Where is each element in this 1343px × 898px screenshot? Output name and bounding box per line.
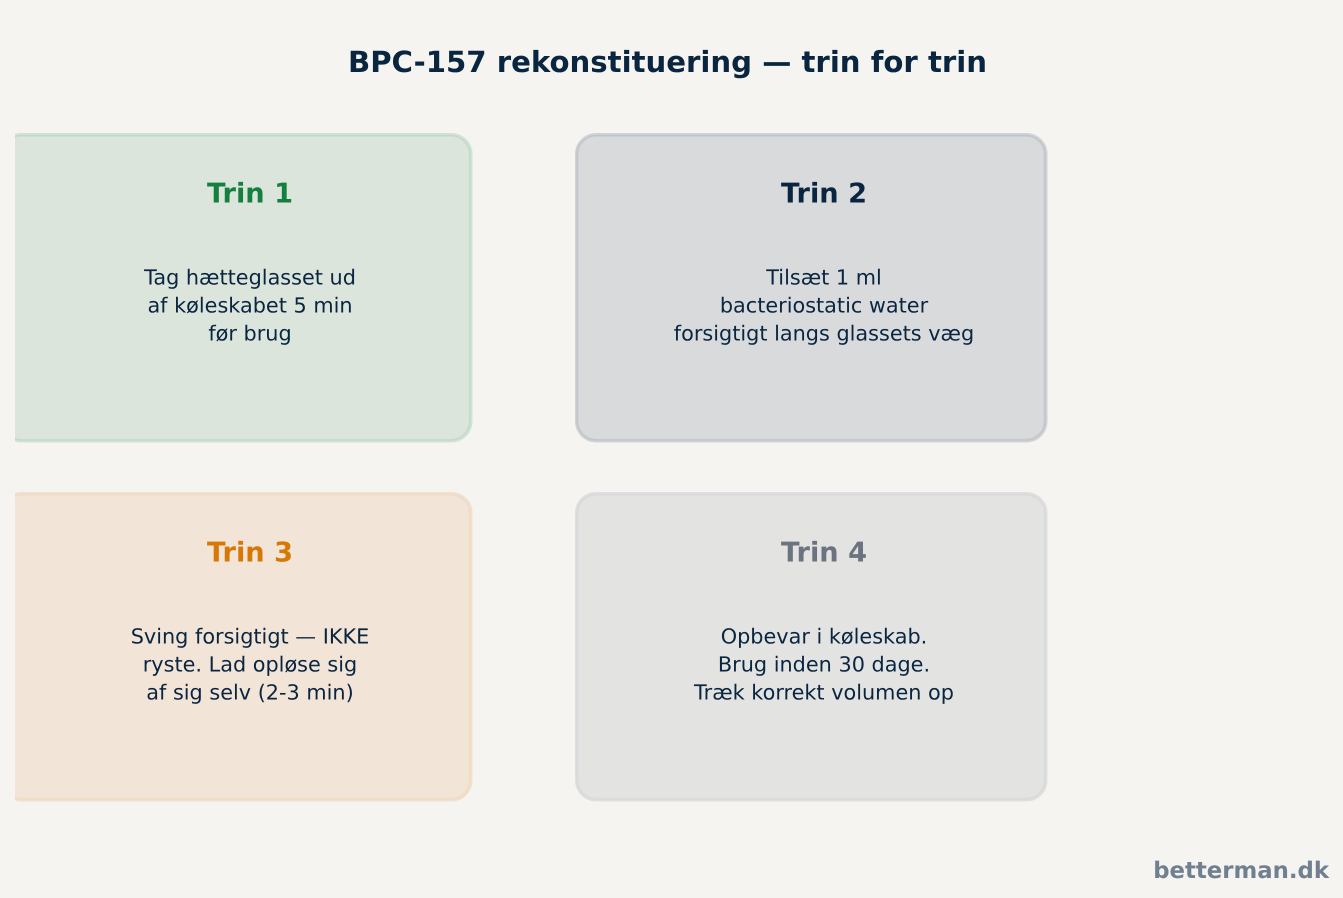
text block: Trin 2 instructions: Tilsæt 1 ml <box>765 266 882 290</box>
text block: Trin 4 instructions: Opbevar i køleskab. <box>721 624 927 648</box>
text block: Trin 1 instructions: før brug <box>208 322 292 346</box>
text block: Trin 4 instructions: Brug inden 30 dage. <box>718 652 930 676</box>
text block: Trin 3 instructions: af sig selv (2-3 min) <box>146 680 354 704</box>
title: BPC-157 rekonstituering — trin for trin <box>348 45 987 79</box>
heading: Trin 3: Trin 3 <box>207 538 293 568</box>
panel: Trin 4 <box>577 494 1046 800</box>
text block: Trin 2 instructions: forsigtigt langs glassets væg <box>674 322 974 346</box>
panel: Trin 2 <box>577 135 1046 440</box>
text block: Trin 1 instructions: Tag hætteglasset ud <box>143 266 356 290</box>
watermark: betterman.dk <box>1153 858 1330 884</box>
text block: Trin 3 instructions: ryste. Lad opløse sig <box>143 652 357 676</box>
heading: Trin 2: Trin 2 <box>781 178 867 210</box>
text block: Trin 2 instructions: bacteriostatic water <box>720 294 929 318</box>
text block: Trin 4 instructions: Træk korrekt volumen op <box>693 680 954 704</box>
heading: Trin 1: Trin 1 <box>207 178 293 210</box>
panel: Trin 3 <box>2 494 470 800</box>
panel: Trin 1 <box>2 135 470 440</box>
text block: Trin 3 instructions: Sving forsigtigt — IKKE <box>131 624 369 648</box>
heading: Trin 4: Trin 4 <box>781 538 867 568</box>
text block: Trin 1 instructions: af køleskabet 5 min <box>147 294 353 318</box>
